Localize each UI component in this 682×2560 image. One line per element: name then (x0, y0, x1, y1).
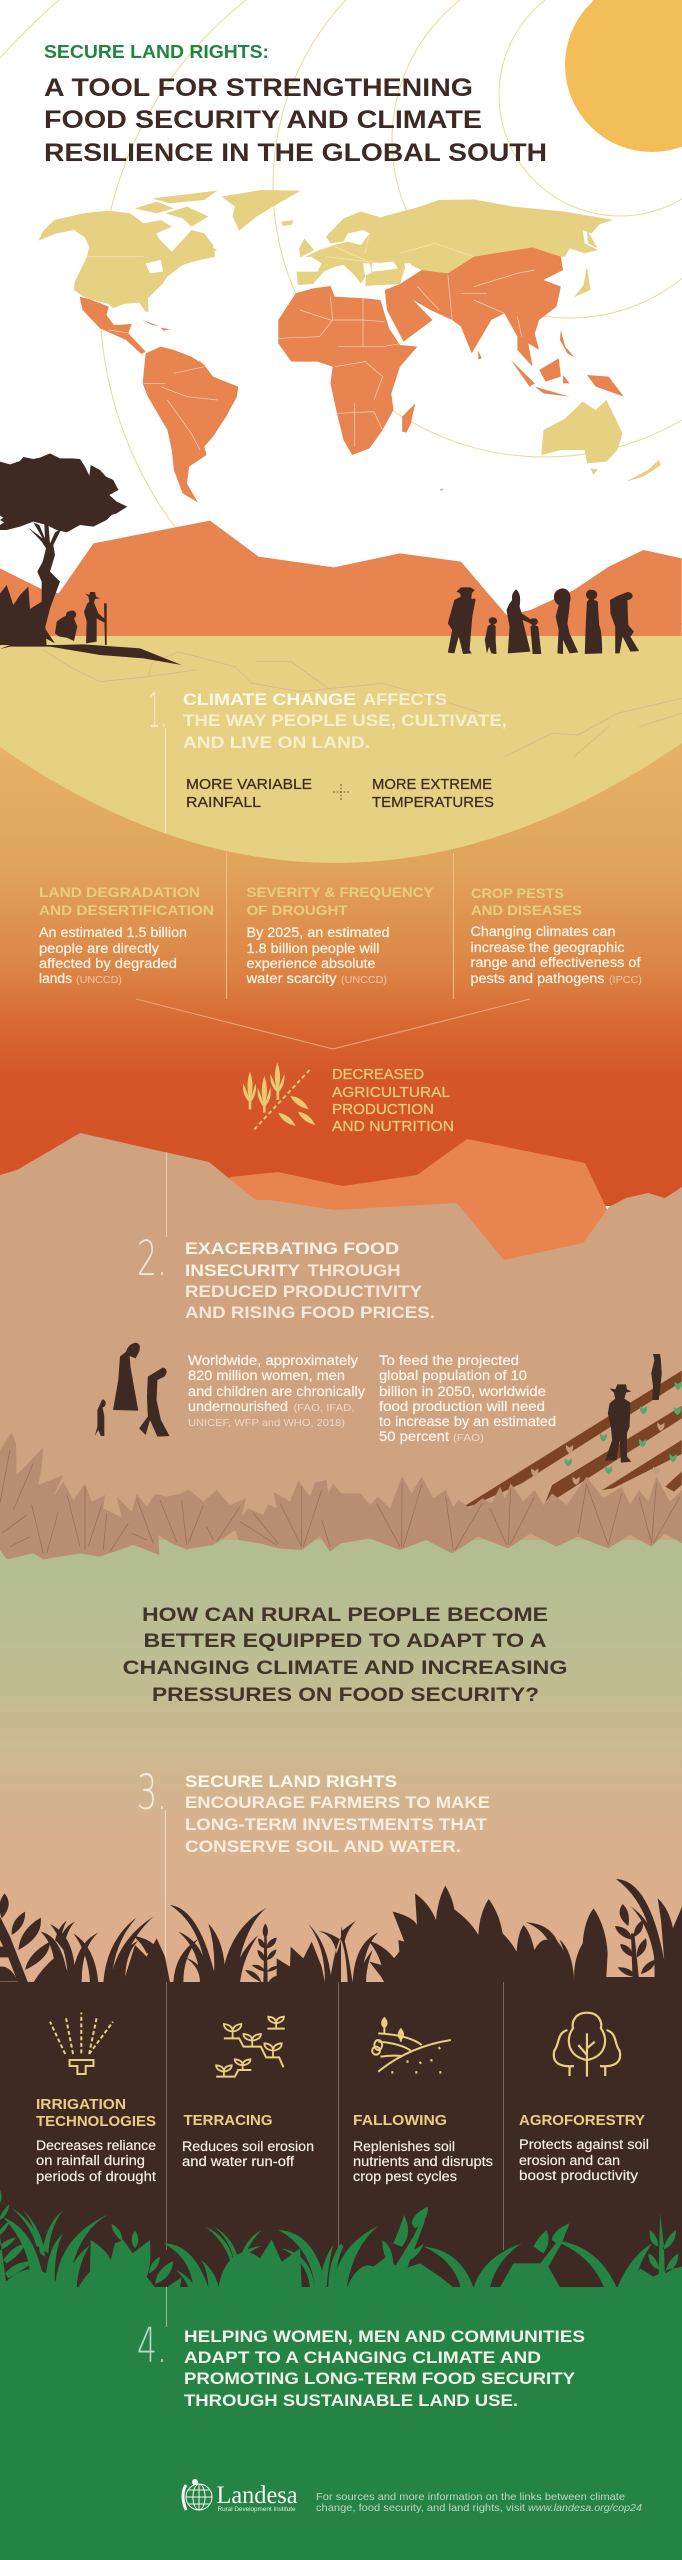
text: 1. (148, 683, 167, 739)
man with staff (448, 587, 476, 654)
numeral 2: 2. (137, 1231, 167, 1287)
tagline: Rural Development Institute (218, 2507, 296, 2513)
body: nutrients and disrupts (353, 2154, 493, 2169)
green seedlings (565, 1382, 682, 1474)
vertical line section 1 (164, 728, 166, 833)
section 4 heading (184, 2327, 585, 2410)
heading 2: TECHNOLOGIES (36, 2114, 156, 2130)
body: Replenishes soil (353, 2139, 455, 2154)
source: (FAO, IFAD, (294, 1402, 354, 1414)
section 2 heading (185, 1239, 435, 1322)
woman (113, 1343, 140, 1411)
heading: SEVERITY & FREQUENCY (246, 884, 434, 900)
green panel (0, 2287, 682, 2560)
practice: fallowing (353, 2018, 493, 2184)
body: 1.8 billion people will (246, 941, 380, 956)
body: billion in 2050, worldwide (379, 1384, 546, 1399)
body: To feed the projected (379, 1353, 519, 1368)
question heading: CHANGING CLIMATE AND INCREASING (123, 1657, 568, 1679)
body: periods of drought (36, 2169, 156, 2184)
heading 2: OF DROUGHT (246, 902, 348, 918)
child one (485, 617, 497, 654)
leaf veins (0, 1450, 680, 1553)
section 4 heading: PROMOTING LONG-TERM FOOD SECURITY (184, 2369, 576, 2388)
body: Worldwide, approximately (188, 1353, 358, 1368)
column dividers: practices (166, 1982, 504, 2250)
ground cracks (43, 650, 682, 757)
body: undernourished (188, 1399, 288, 1414)
body: 50 percent (379, 1429, 449, 1444)
rainfall 2: RAINFALL (186, 795, 261, 811)
question heading: PRESSURES ON FOOD SECURITY? (152, 1684, 539, 1706)
person carrying load (554, 588, 578, 654)
bold part: CLIMATE CHANGE (183, 690, 356, 709)
rainfall: MORE VARIABLE (186, 777, 312, 793)
distant farmer (651, 1354, 662, 1400)
section 4 heading: HELPING WOMEN, MEN AND COMMUNITIES (184, 2327, 585, 2346)
body: lands (39, 971, 72, 986)
heading: CROP PESTS (471, 885, 564, 901)
footer note (316, 2491, 642, 2514)
line 4: CONSERVE SOIL AND WATER. (185, 1837, 461, 1856)
body: water scarcity (245, 971, 337, 986)
ground panel: arid land (0, 636, 682, 863)
source: (IPCC) (609, 974, 642, 986)
practice: agroforestry (519, 2013, 649, 2183)
plus icon (333, 784, 349, 800)
body: and children are chronically (188, 1384, 365, 1399)
body: affected by degraded (39, 956, 177, 971)
field with farmers (461, 1354, 682, 1508)
body: boost productivity (519, 2168, 638, 2183)
line 3: AND LIVE ON LAND. (183, 733, 370, 752)
background: white sky (0, 0, 682, 760)
child two (530, 618, 541, 654)
heading 2: AND DESERTIFICATION (39, 902, 214, 918)
tan land section 2 (0, 1133, 682, 1560)
body: global population of 10 (379, 1368, 527, 1383)
body (353, 2139, 493, 2184)
body: experience absolute (246, 956, 376, 971)
line 4: AND RISING FOOD PRICES. (185, 1303, 435, 1322)
bush silhouette (0, 1433, 682, 1559)
bold line 2: INSECURITY (185, 1261, 301, 1280)
bold line 1: EXACERBATING FOOD (185, 1239, 399, 1258)
climate drivers (186, 777, 494, 811)
converging arrow lines (136, 999, 530, 1049)
heading: AGROFORESTRY (519, 2113, 645, 2129)
tree trunk (28, 522, 62, 643)
body (379, 1353, 556, 1444)
vertical line section 2 (166, 1152, 168, 1237)
decreased production label: PRODUCTION (332, 1102, 434, 1118)
body (182, 2139, 314, 2169)
man (139, 1367, 170, 1437)
impact column 2 (245, 884, 434, 986)
orange mountains section 2 (230, 1139, 612, 1280)
footer note: change, food security, and land rights, visit (316, 2502, 525, 2514)
body: pests and pathogens (470, 971, 605, 986)
map: lakes and inland seas (146, 260, 415, 278)
woman with pot and child (507, 589, 533, 653)
temperatures: MORE EXTREME (372, 777, 492, 793)
heading: IRRIGATION (36, 2097, 126, 2113)
body: An estimated 1.5 billion (39, 925, 187, 940)
body: By 2025, an estimated (246, 925, 390, 940)
sun (565, 0, 682, 152)
decreased production label (332, 1067, 454, 1135)
body: Reduces soil erosion (182, 2139, 314, 2154)
decreased production label: DECREASED (332, 1067, 424, 1083)
standing figure with staff (84, 592, 107, 645)
body (519, 2137, 649, 2183)
body (188, 1353, 365, 1414)
practice: terracing (182, 2017, 314, 2169)
impact column 1 (39, 884, 214, 986)
section 3 gradient background (0, 1540, 682, 1990)
body: range and effectiveness of (470, 955, 641, 970)
green plant silhouettes (0, 2190, 682, 2287)
map: global south land (80, 247, 624, 502)
bold line: SECURE LAND RIGHTS (185, 1772, 397, 1791)
question heading: BETTER EQUIPPED TO ADAPT TO A (144, 1630, 546, 1652)
section 1 heading (183, 690, 507, 752)
body: Protects against soil (519, 2137, 649, 2152)
body: on rainfall during (36, 2153, 145, 2168)
map: country borders (109, 270, 535, 450)
question heading (123, 1604, 568, 1706)
footer note: For sources and more information on the links between climate (316, 2491, 625, 2503)
heading: FALLOWING (353, 2113, 447, 2129)
child (95, 1399, 106, 1436)
body: erosion and can (519, 2153, 620, 2168)
title block (44, 42, 547, 167)
through: THROUGH (308, 1261, 400, 1280)
icon: terraces with seedlings (216, 2017, 285, 2077)
decreased production label: AND NUTRITION (332, 1119, 454, 1135)
wordmark: Landesa (216, 2482, 298, 2509)
body: crop pest cycles (353, 2169, 457, 2184)
tan seedlings (531, 1423, 664, 1485)
section 3 heading (185, 1772, 490, 1856)
dark plant silhouettes: right half (341, 1879, 682, 1984)
subtitle: SECURE LAND RIGHTS: (44, 42, 269, 62)
bent person with load (610, 592, 639, 653)
body (245, 925, 390, 986)
vertical line section 4 (166, 2287, 168, 2327)
statistic: undernourished (188, 1353, 365, 1429)
body: 820 million women, men (188, 1368, 345, 1383)
tree with seated figures (0, 453, 182, 665)
body (470, 924, 641, 986)
source: (FAO) (453, 1432, 484, 1444)
numeral 3: 3. (137, 1765, 167, 1821)
furrows (461, 1371, 682, 1508)
world map (38, 190, 661, 502)
footer note: www.landesa.org/cop24 (528, 2502, 642, 2514)
body: Changing climates can (470, 924, 616, 939)
section 4 heading: ADAPT TO A CHANGING CLIMATE AND (184, 2348, 541, 2367)
dark plant silhouettes: left half (0, 1893, 341, 1983)
source: UNICEF, WFP and WHO, 2018) (188, 1417, 345, 1429)
numeral 4: 4. (137, 2318, 167, 2374)
heading 2: AND DISEASES (471, 902, 582, 918)
line 3: REDUCED PRODUCTIVITY (185, 1282, 423, 1301)
line 2: THE WAY PEOPLE USE, CULTIVATE, (183, 711, 507, 730)
orange mountains (0, 521, 682, 650)
icon: trees (554, 2013, 620, 2077)
title line 2: FOOD SECURITY AND CLIMATE (44, 106, 482, 134)
tree canopy (0, 453, 127, 532)
lower section 1 gradient background (0, 736, 682, 1206)
heading: TERRACING (184, 2113, 272, 2129)
body: people are directly (39, 941, 159, 956)
logo globe (183, 2480, 212, 2510)
body: food production will need (379, 1399, 545, 1414)
body (39, 925, 187, 986)
ground ledge (0, 644, 182, 665)
statistic: food production (379, 1353, 556, 1444)
vertical line section 3 (164, 1810, 166, 1985)
body: Decreases reliance (36, 2138, 156, 2153)
heading: LAND DEGRADATION (39, 884, 200, 900)
body: increase the geographic (470, 940, 625, 955)
icon: fallow field (372, 2018, 451, 2072)
temperatures 2: TEMPERATURES (372, 795, 494, 811)
map: north borders (87, 233, 474, 263)
decorative sun rings (0, 0, 682, 681)
practice: irrigation technologies (36, 2013, 156, 2184)
source: (UNCCD) (341, 974, 387, 986)
source: (UNCCD) (76, 974, 122, 986)
tan leaf bushes (0, 1433, 682, 1559)
icon: sprinkler (50, 2013, 113, 2074)
farmer (605, 1384, 631, 1463)
title line 3: RESILIENCE IN THE GLOBAL SOUTH (44, 139, 547, 167)
kneeling figure (55, 610, 77, 641)
column dividers (226, 853, 454, 999)
body (36, 2138, 156, 2184)
logo: Landesa (183, 2480, 298, 2513)
impact column 3 (470, 885, 642, 986)
line 3: LONG-TERM INVESTMENTS THAT (185, 1815, 488, 1834)
decreased production label: AGRICULTURAL (332, 1085, 450, 1101)
map: global north land (38, 190, 661, 482)
source (188, 1402, 354, 1429)
section 4 heading: THROUGH SUSTAINABLE LAND USE. (184, 2391, 518, 2410)
person with basket (585, 590, 602, 654)
walking family silhouettes (448, 587, 639, 654)
title line 1: A TOOL FOR STRENGTHENING (44, 74, 473, 102)
affects: AFFECTS (363, 690, 447, 709)
line 2: ENCOURAGE FARMERS TO MAKE (185, 1793, 490, 1812)
body: and water run-off (182, 2154, 294, 2169)
undergrowth (0, 585, 47, 645)
dark brown panel: practices (0, 1982, 682, 2298)
body: to increase by an estimated (379, 1414, 556, 1429)
question heading: HOW CAN RURAL PEOPLE BECOME (142, 1604, 548, 1626)
hungry family silhouettes (95, 1343, 170, 1437)
icon: wheat decline (243, 1063, 315, 1131)
